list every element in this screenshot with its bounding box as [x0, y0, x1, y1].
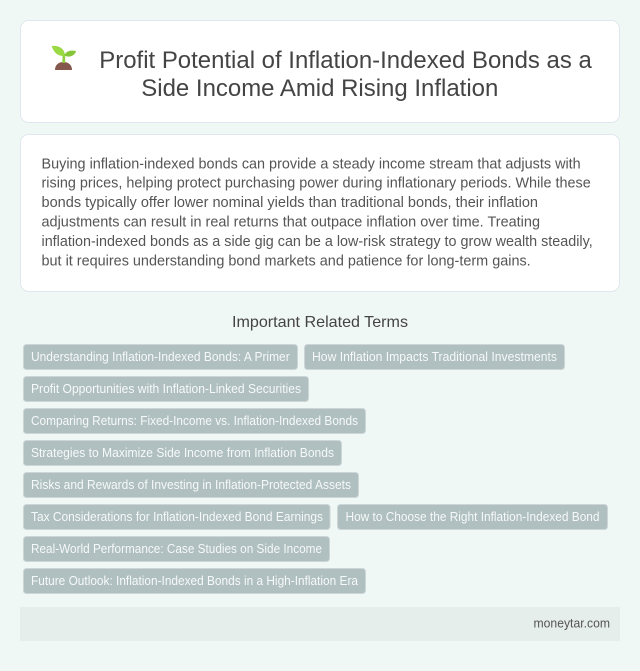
tag: real-world performance — [24, 536, 330, 562]
tag: traditional investments — [304, 344, 564, 370]
footer — [20, 607, 620, 641]
text block: summary paragraph: bonds typically offer lower nominal yields than traditional bonds, their inflation — [42, 195, 538, 211]
tag: profit opportunities — [24, 376, 308, 402]
text block: summary paragraph: adjustments can result in real returns that outpace inflation over time. Treating — [42, 214, 540, 230]
panel: header — [20, 20, 620, 122]
tag list: related terms — [24, 344, 608, 594]
tag: tax considerations — [24, 504, 330, 530]
tag: comparing returns — [24, 408, 366, 434]
tag: future outlook — [24, 568, 366, 594]
text block: summary paragraph: inflation-indexed bonds as a side gig can be a low-risk strategy to grow wealth steadily, — [42, 234, 593, 250]
tag: tax considerations: Tax Considerations for Inflation-Indexed Bond Earnings — [31, 509, 323, 524]
tag: strategies — [24, 440, 342, 466]
text block: summary paragraph — [42, 156, 593, 269]
title — [99, 47, 592, 102]
tag: choose the right bond — [338, 504, 608, 530]
heading: important related terms: Important Related Terms — [232, 314, 408, 331]
tag: comparing returns: Comparing Returns: Fixed-Income vs. Inflation-Indexed Bonds — [31, 413, 358, 428]
tag: understanding — [24, 344, 298, 370]
icon: sprout — [52, 46, 76, 70]
text block: summary paragraph: rising prices, helping protect purchasing power during inflationary periods. While these — [42, 176, 591, 192]
tag: risks and rewards: Risks and Rewards of Investing in Inflation-Protected Assets — [31, 477, 351, 492]
tag: understanding: Understanding Inflation-Indexed Bonds: A Primer — [31, 349, 290, 364]
tag: future outlook: Future Outlook: Inflation-Indexed Bonds in a High-Inflation Era — [31, 573, 359, 588]
tag: traditional investments: How Inflation Impacts Traditional Investments — [312, 349, 557, 364]
tag: risks and rewards — [24, 472, 358, 498]
tag: strategies: Strategies to Maximize Side Income from Inflation Bonds — [31, 445, 334, 460]
text block: summary paragraph: Buying inflation-indexed bonds can provide a steady income stream that adjusts with — [42, 156, 581, 172]
title: Side Income Amid Rising Inflation — [141, 75, 498, 102]
tag: choose the right bond: How to Choose the Right Inflation-Indexed Bond — [346, 509, 600, 524]
panel: summary text — [20, 134, 620, 292]
tag: real-world performance: Real-World Performance: Case Studies on Side Income — [31, 541, 322, 556]
tag: profit opportunities: Profit Opportunities with Inflation-Linked Securities — [31, 381, 301, 396]
text block: summary paragraph: but it requires understanding bond markets and patience for long-term gains. — [42, 253, 531, 269]
title: Profit Potential of Inflation-Indexed Bonds as a — [99, 47, 592, 74]
footer source text: moneytar.com — [534, 616, 610, 630]
